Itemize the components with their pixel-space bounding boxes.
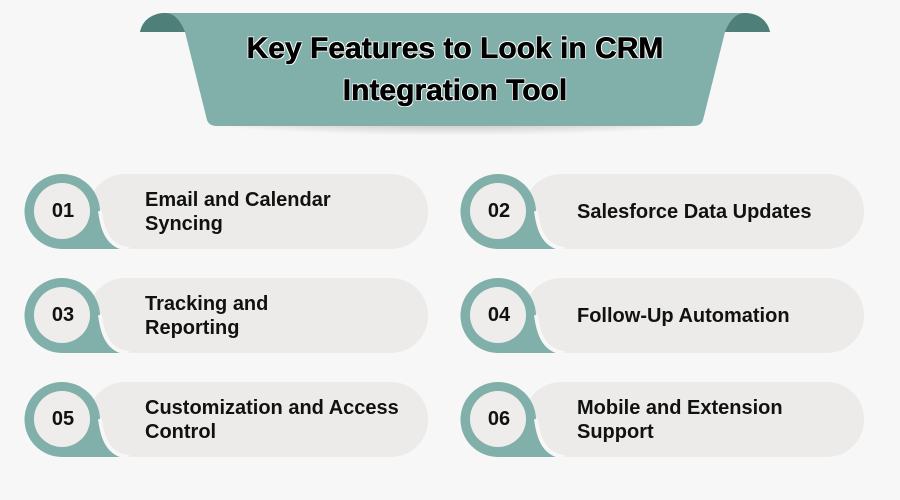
card 06 <box>460 382 864 457</box>
card 05: 05 <box>52 408 74 430</box>
card 06: Mobile and Extension <box>577 396 783 418</box>
card 03: Tracking and <box>145 292 268 314</box>
card 05: Control <box>145 420 216 442</box>
card 04: 04 <box>488 304 510 326</box>
title text: Integration Tool <box>343 74 567 107</box>
card 02 <box>460 174 864 249</box>
card 03 <box>24 278 428 353</box>
card 01: 01 <box>52 200 74 222</box>
card 04: Follow-Up Automation <box>577 304 790 326</box>
title banner <box>140 13 770 134</box>
card 06: 06 <box>488 408 510 430</box>
card 01: Syncing <box>145 212 223 234</box>
card 05: Customization and Access <box>145 396 399 418</box>
card 05 <box>24 382 428 457</box>
card 06: Support <box>577 420 654 442</box>
card 01 <box>24 174 428 249</box>
card 03: 03 <box>52 304 74 326</box>
title text <box>247 32 663 107</box>
title text: Key Features to Look in CRM <box>247 32 663 65</box>
card 02: Salesforce Data Updates <box>577 200 812 222</box>
card 02: 02 <box>488 200 510 222</box>
card 01: Email and Calendar <box>145 188 331 210</box>
card 04 <box>460 278 864 353</box>
card 03: Reporting <box>145 316 239 338</box>
